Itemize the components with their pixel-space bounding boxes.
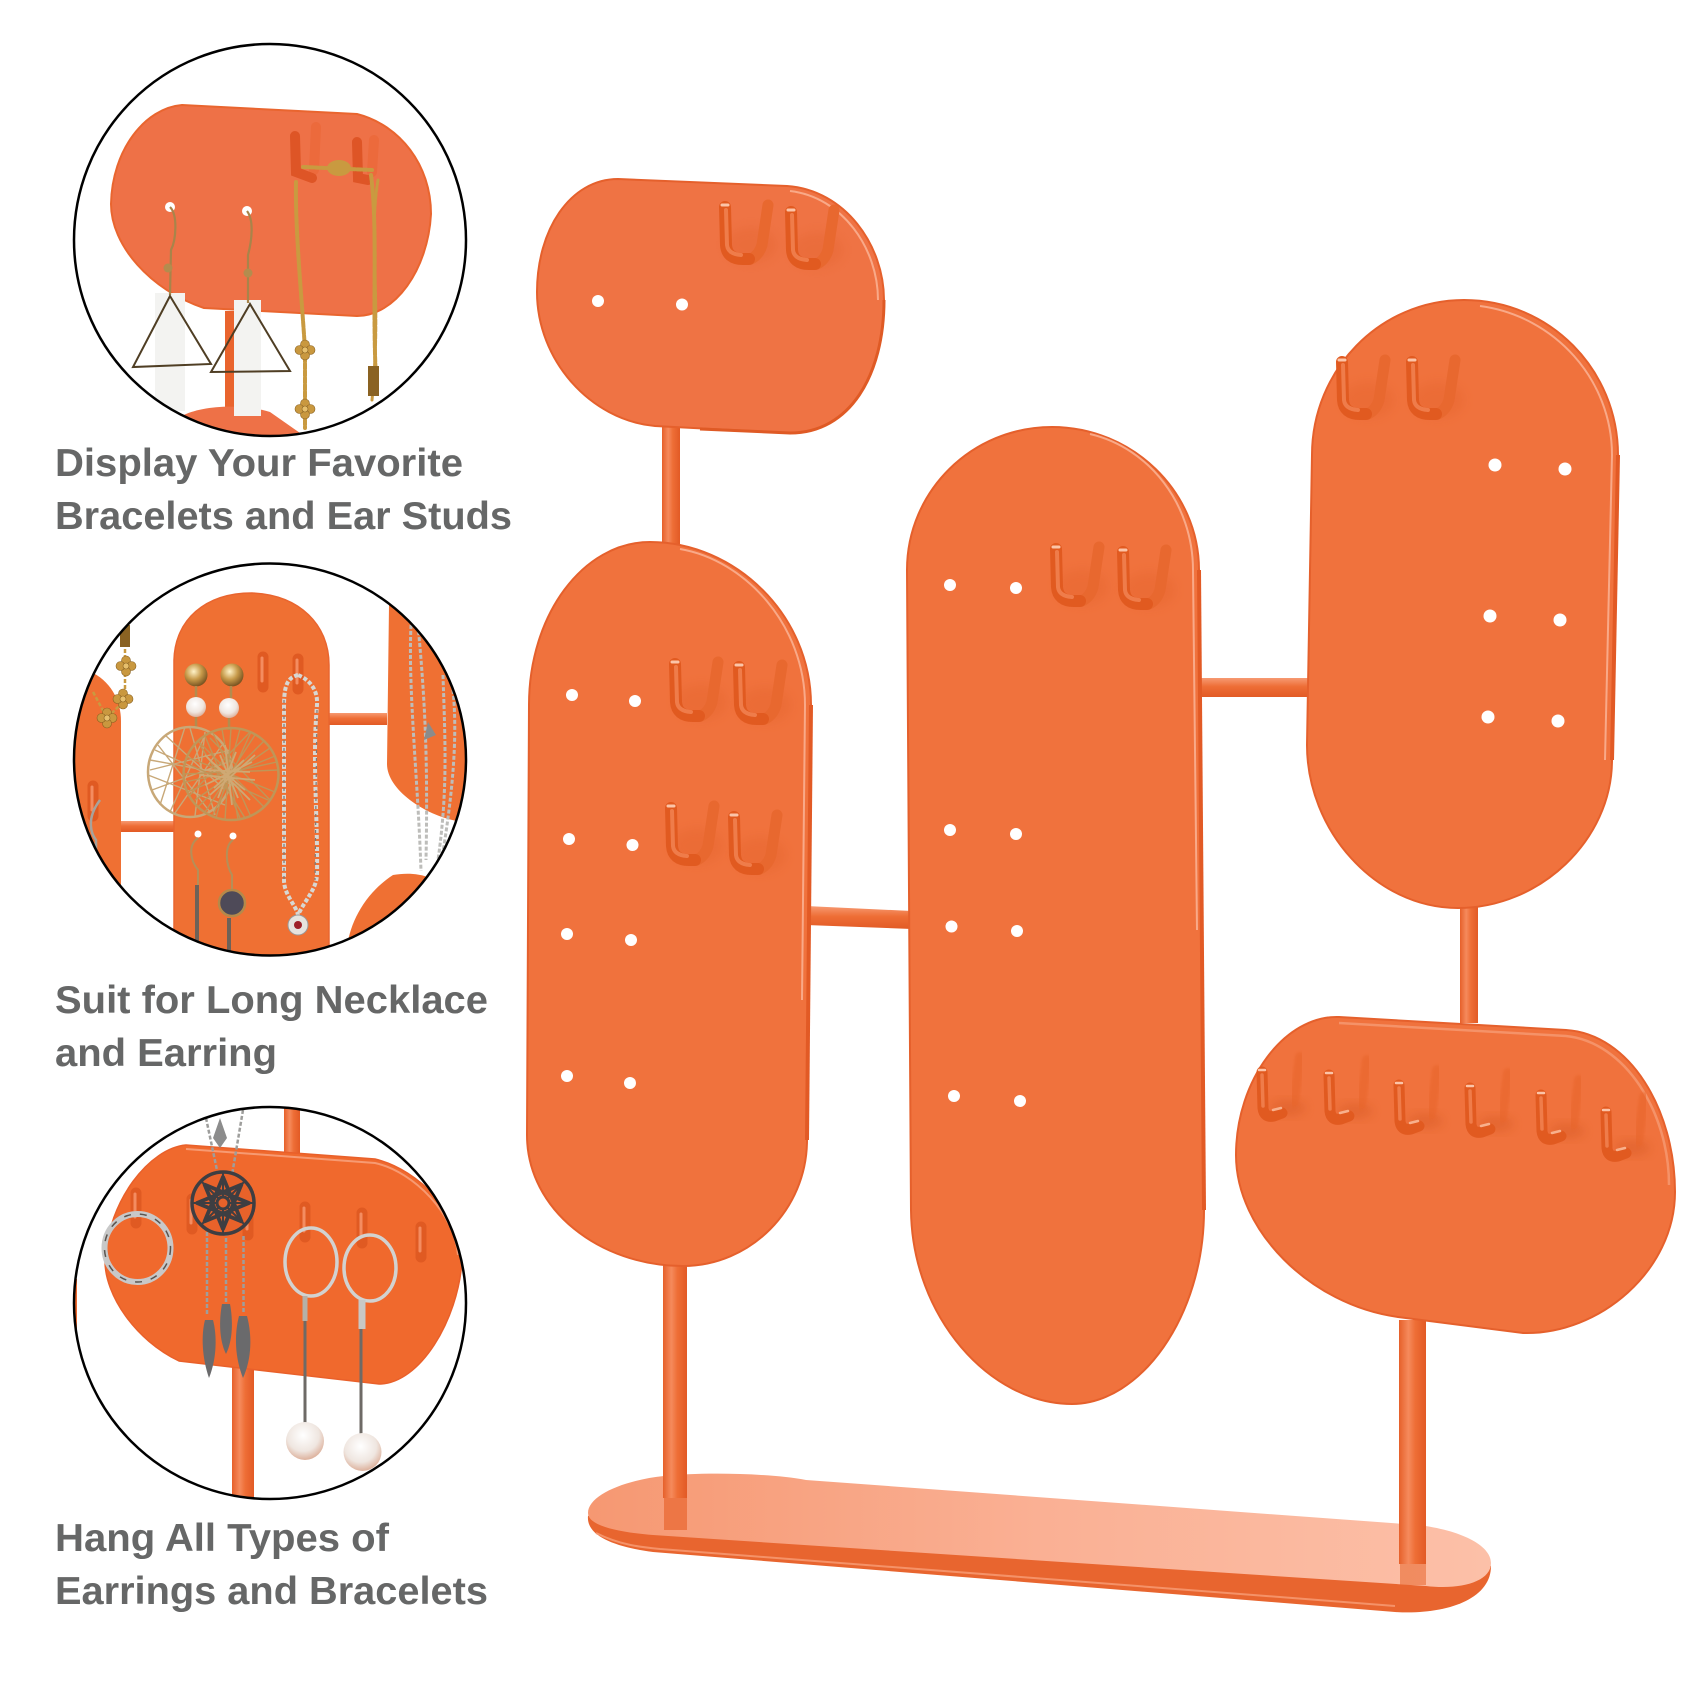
post reflections [664, 1497, 687, 1530]
hooks [295, 127, 374, 180]
caption 1 [55, 442, 512, 538]
left earring hook [92, 786, 93, 816]
bar: left panel to center panel [806, 906, 912, 929]
panel: center tall [907, 427, 1204, 1404]
caption 3: Hang All Types of [55, 1517, 390, 1560]
caption 3 [55, 1517, 488, 1613]
post: left panel to base [663, 1263, 687, 1498]
right necklaces [410, 625, 455, 871]
caption 2: Suit for Long Necklace [55, 979, 488, 1022]
right detail panel [387, 605, 465, 821]
hoops with pearl drops [285, 1228, 337, 1296]
post: right panel to lower right panel [1460, 905, 1478, 1023]
silver necklace loop [284, 675, 317, 915]
post: lower right panel to base [1399, 1320, 1426, 1564]
caption 2: and Earring [55, 1032, 277, 1075]
panel: top pill [537, 179, 884, 433]
caption 1: Bracelets and Ear Studs [55, 495, 512, 538]
lower right detail panel [348, 874, 426, 938]
bracelets [296, 167, 378, 428]
bar: center panel to right panel [1196, 678, 1310, 697]
dreamcatcher [192, 1172, 254, 1234]
stand illustration [527, 179, 1675, 1612]
caption 1: Display Your Favorite [55, 442, 463, 485]
panel: upper right [1307, 300, 1618, 908]
connecting bars [329, 713, 387, 725]
callout circle 1: earrings and bracelets on top panel [74, 44, 466, 440]
wire disc right [184, 728, 278, 820]
caption 3: Earrings and Bracelets [55, 1570, 488, 1613]
caption 2 [55, 979, 488, 1075]
left detail panel [75, 674, 121, 885]
panel: left tall [527, 542, 811, 1266]
gold flowers [91, 649, 126, 714]
central detail panel [174, 593, 329, 960]
post: top panel to left panel [662, 427, 680, 545]
earrings [155, 293, 185, 411]
lower earrings [194, 830, 202, 838]
callout circle 3: all types of earrings and bracelets [70, 1105, 466, 1502]
necklace chains [206, 1110, 244, 1314]
drop earrings [184, 664, 208, 686]
panel: lower right [1236, 1017, 1675, 1333]
base plate [588, 1474, 1491, 1612]
wire disc left [148, 727, 232, 817]
feathers [203, 1304, 250, 1378]
detail panel [105, 1145, 462, 1384]
detail panel [111, 105, 431, 316]
ring [104, 1214, 170, 1282]
callout circle 2: long necklace and earring [60, 564, 480, 970]
